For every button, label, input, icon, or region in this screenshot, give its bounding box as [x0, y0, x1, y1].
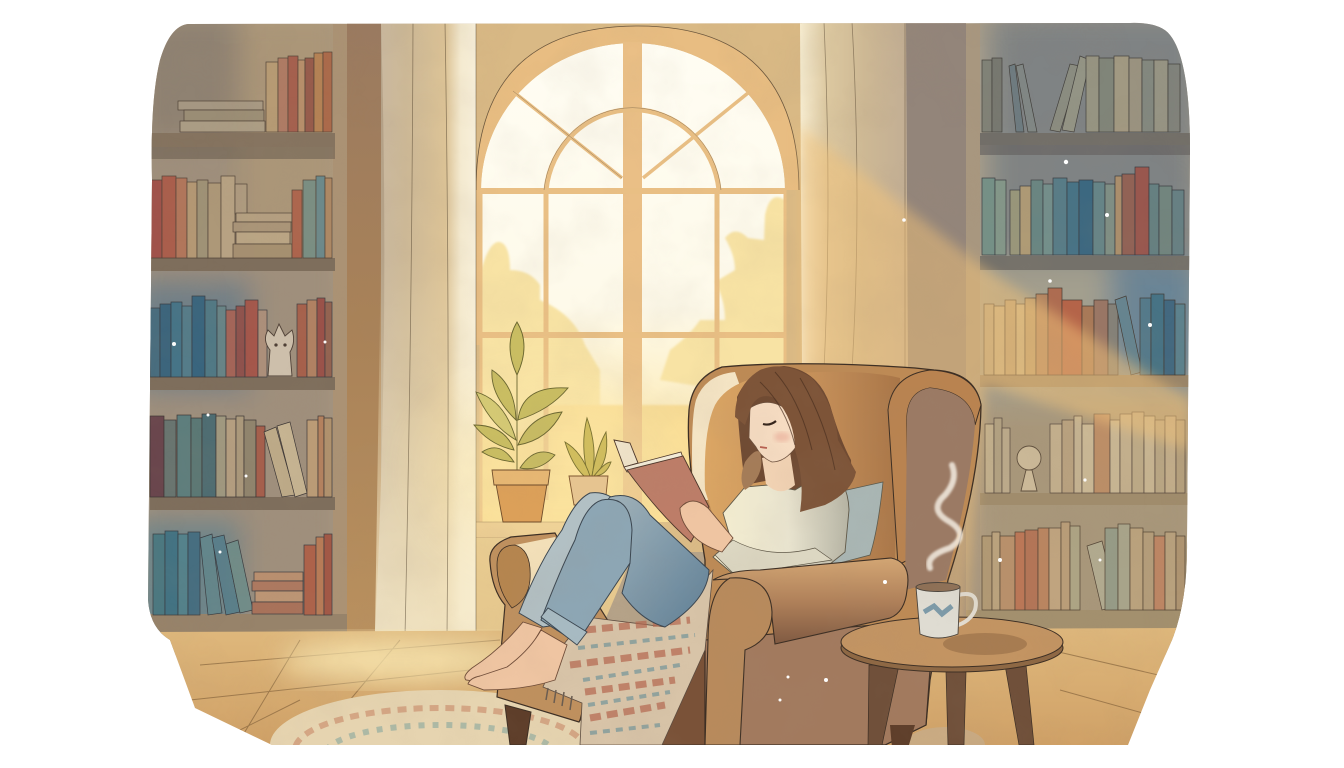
light ray — [800, 125, 1190, 640]
torso sweater — [713, 470, 849, 574]
woman — [465, 366, 883, 690]
chair back — [688, 364, 981, 745]
figurine left — [265, 324, 294, 376]
cuff — [541, 608, 587, 645]
table top — [841, 617, 1063, 667]
closed eye — [763, 421, 776, 425]
chair back highlight — [692, 372, 745, 500]
plant small — [565, 418, 611, 505]
book — [614, 440, 709, 542]
books right shelf 2 — [982, 167, 1184, 255]
frame right — [965, 24, 1190, 634]
side table — [841, 617, 1063, 745]
window wall — [476, 22, 802, 552]
glass — [481, 44, 785, 406]
pot — [492, 470, 550, 522]
floor — [150, 628, 1190, 750]
left arm scroll — [497, 545, 530, 608]
left wall strip — [347, 22, 381, 634]
books shelf 5 — [153, 531, 332, 615]
right curtain — [800, 22, 908, 370]
leaves — [474, 322, 568, 472]
right wall strip — [906, 22, 966, 634]
far leg — [519, 493, 625, 627]
chair front panel — [705, 620, 930, 745]
sleeve — [715, 540, 832, 575]
books right shelf 3 — [984, 288, 1185, 375]
seat base — [580, 640, 710, 745]
plant large — [474, 322, 568, 522]
scene — [130, 10, 1205, 768]
left arm — [490, 533, 620, 722]
window glow — [448, 387, 642, 551]
right shelf wash — [975, 10, 1205, 650]
thigh — [600, 495, 709, 627]
figurine right — [1017, 446, 1041, 491]
watercolor mottling — [140, 15, 1200, 755]
books shelf 3 — [150, 296, 332, 377]
lips — [760, 447, 767, 448]
table shadow — [943, 633, 1027, 655]
hand — [680, 501, 733, 552]
rug — [270, 690, 985, 745]
left hair lock — [742, 451, 761, 490]
left bookcase — [150, 24, 348, 636]
hair back — [737, 366, 851, 514]
hair strands — [760, 372, 835, 470]
right bookcase — [965, 24, 1190, 634]
blush — [774, 432, 790, 442]
pillow — [832, 482, 883, 565]
face — [749, 402, 797, 462]
front arm of chair — [705, 558, 908, 745]
foliage — [482, 196, 784, 480]
hair front — [735, 366, 856, 512]
near lower leg — [541, 499, 632, 643]
left curtain — [375, 22, 476, 637]
frame — [150, 24, 348, 636]
illustration: woman reading in an armchair by a window — [148, 22, 1190, 745]
books right shelf 1 — [982, 56, 1180, 132]
chair leg — [505, 705, 531, 745]
wall — [140, 15, 1200, 655]
books shelf 1 — [178, 52, 332, 132]
books shelf 2 — [150, 176, 332, 258]
chair back inner — [705, 372, 900, 570]
books shelf 4 — [150, 414, 332, 497]
window frame — [476, 26, 799, 525]
window — [476, 26, 800, 631]
feet — [465, 622, 567, 690]
left shelf wash — [130, 10, 345, 650]
books right shelf 4 — [985, 412, 1185, 493]
wall under sill — [476, 538, 640, 632]
blanket — [543, 570, 713, 745]
wing rim — [888, 370, 981, 565]
steam — [929, 465, 960, 568]
books right shelf 5 — [982, 522, 1185, 610]
mug — [916, 582, 976, 638]
neck — [762, 452, 795, 491]
window sill — [476, 522, 566, 538]
chair leg right — [890, 725, 915, 748]
wing panel — [905, 388, 975, 590]
armchair — [490, 364, 981, 748]
left arm highlight — [514, 537, 575, 590]
dust specks — [172, 160, 1152, 702]
table legs — [868, 665, 1034, 745]
table side — [841, 624, 1063, 672]
small pot — [569, 476, 608, 505]
